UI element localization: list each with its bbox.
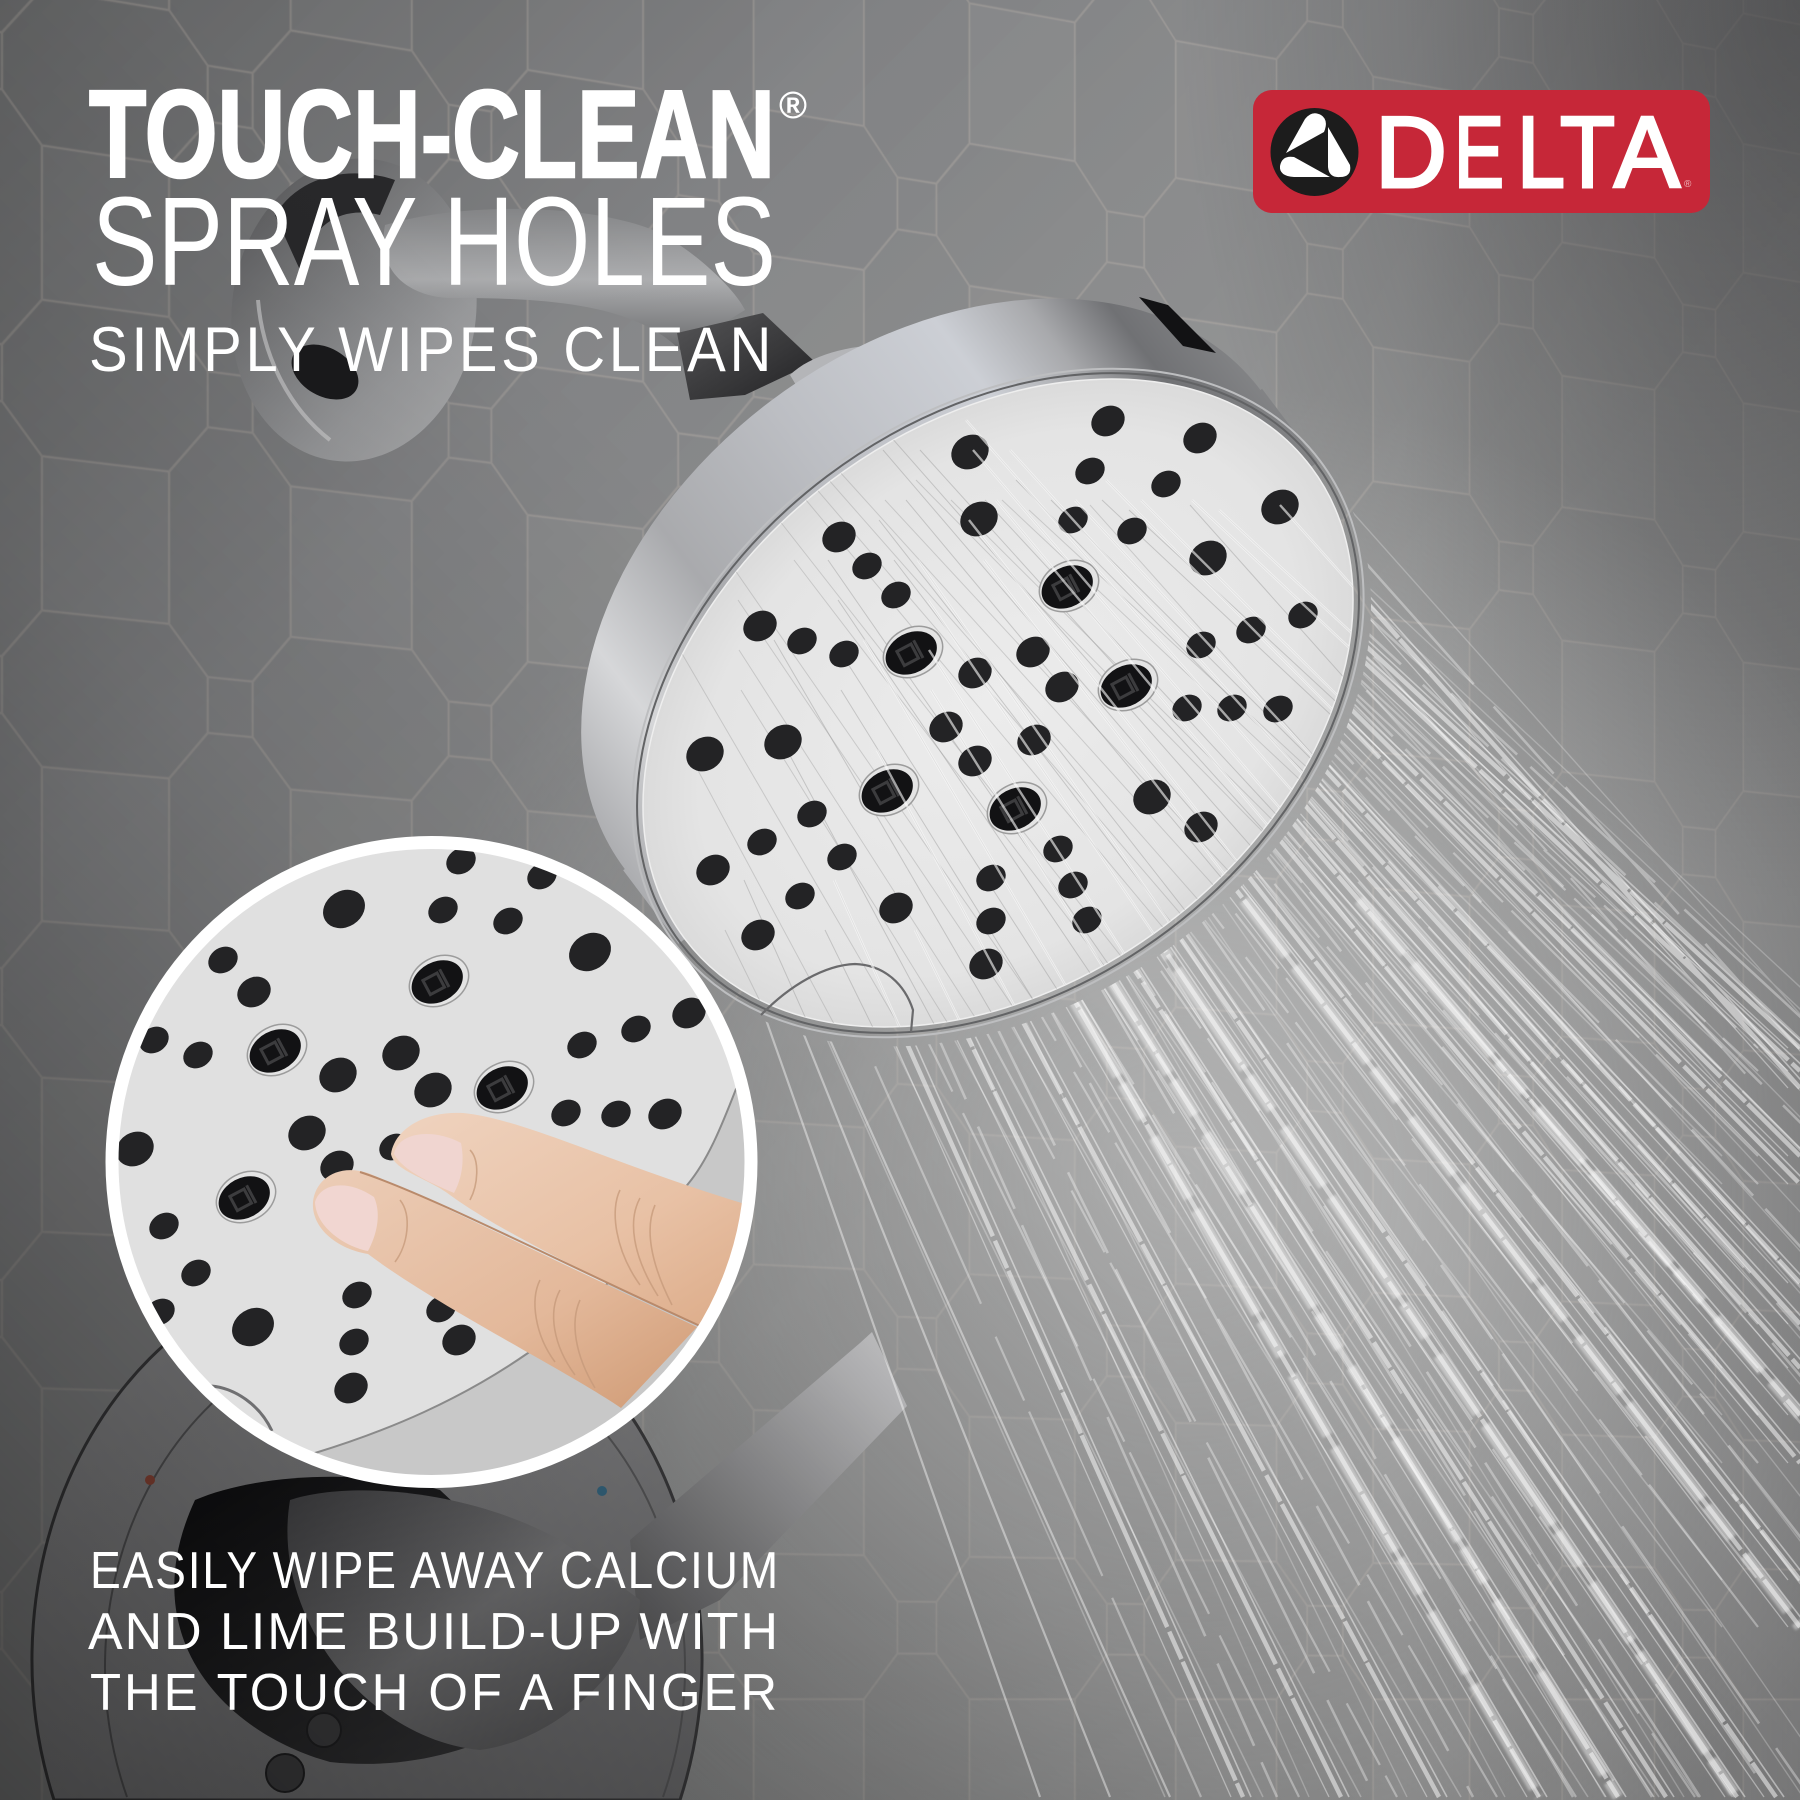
- inset face plate: [118, 849, 736, 1454]
- logo wordmark: E: [1454, 97, 1504, 209]
- water spray streams: [745, 420, 1800, 1797]
- logo red badge: [1253, 90, 1710, 213]
- chrome rim and face plate: [503, 230, 1493, 1176]
- hot indicator: [145, 1475, 155, 1485]
- registered mark: ®: [779, 85, 807, 127]
- upper finger: [391, 1113, 745, 1326]
- inset tile background: [317, 1091, 744, 1475]
- shower arm wall flange: [212, 143, 496, 477]
- shower head body: [451, 160, 1434, 1099]
- upper fingernail: [394, 1134, 463, 1193]
- shower arm: [384, 209, 745, 350]
- left-hand thin streams: [766, 1022, 1171, 1798]
- handle knob cap: [287, 1490, 640, 1750]
- caption: [88, 1542, 780, 1722]
- logo emblem: [1270, 108, 1358, 196]
- knuckle wrinkles: [395, 1150, 672, 1388]
- handle knob base: [174, 1477, 600, 1764]
- cold indicator: [597, 1486, 607, 1496]
- inset spray holes: [110, 842, 712, 1410]
- logo wordmark: T: [1560, 97, 1615, 209]
- bright central bands: [1015, 900, 1800, 1797]
- Delta logo: [1253, 90, 1710, 213]
- shower neck: [677, 313, 815, 400]
- inset: close-up of finger wiping spray holes: [100, 830, 770, 1500]
- inset notch: [211, 1386, 272, 1431]
- handle lever: [630, 1332, 907, 1640]
- valve trim plate and handle: [32, 1264, 907, 1800]
- title: [89, 66, 807, 385]
- logo wordmark: A: [1614, 97, 1681, 209]
- collar behind head: [790, 345, 885, 425]
- spray holes: [680, 399, 1323, 986]
- title line: SPRAY HOLES: SPRAY HOLES: [92, 171, 776, 312]
- finger crease: [360, 1172, 700, 1326]
- dark reflection slit: [1139, 297, 1216, 353]
- shower head: [581, 297, 1364, 1038]
- caption line 1: EASILY WIPE AWAY CALCIUM: [90, 1542, 780, 1600]
- logo registered mark: ®: [1684, 179, 1692, 190]
- subtitle: SIMPLY WIPES CLEAN: [89, 315, 775, 385]
- logo wordmark: D: [1375, 97, 1447, 209]
- face notch: [761, 964, 913, 1032]
- caption line 2: AND LIME BUILD-UP WITH: [88, 1603, 780, 1661]
- title line: TOUCH-CLEAN: TOUCH-CLEAN: [89, 66, 775, 204]
- logo wordmark: L: [1517, 97, 1565, 209]
- inset white ring: [112, 842, 751, 1482]
- caption line 3: THE TOUCH OF A FINGER: [90, 1664, 780, 1722]
- logo wordmark: [1375, 97, 1681, 209]
- thin water lines on face: [682, 420, 1353, 1027]
- lower fingernail: [315, 1185, 378, 1251]
- lower finger: [313, 1170, 697, 1408]
- screws: [266, 1713, 341, 1792]
